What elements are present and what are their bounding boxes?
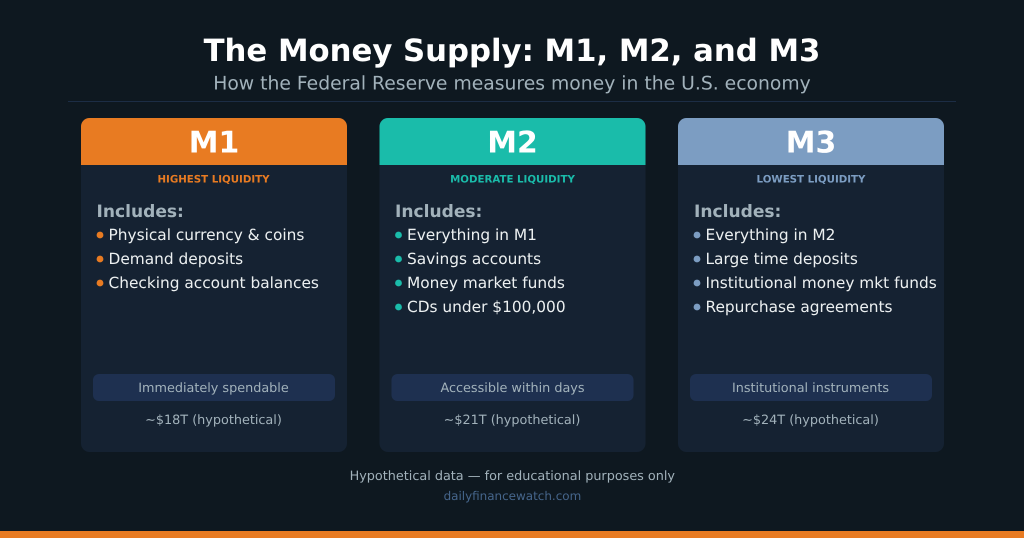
M2 badge [392,374,634,401]
M1 value: ~$18T (hypothetical) [145,413,282,428]
M1 list [97,226,319,292]
panel: M3 [678,118,944,452]
M1 list: Checking account balances [108,274,319,292]
M3 list: Large time deposits [706,250,858,268]
M3 list [694,226,937,316]
M3 value: ~$24T (hypothetical) [742,413,879,428]
footnote: Hypothetical data — for educational purposes only [350,469,675,484]
M2 badge: Accessible within days [440,381,585,396]
bottom accent bar [0,531,1024,538]
M1 includes heading: Includes: [96,202,184,222]
M2 includes heading: Includes: [395,202,482,222]
M3 list: Everything in M2 [706,226,835,244]
title: The Money Supply: M1, M2, and M3 [204,33,820,69]
M3 badge [690,374,932,401]
M2 value: ~$21T (hypothetical) [444,413,580,428]
M2 list: Money market funds [407,274,565,292]
M3 badge: Institutional instruments [732,381,889,396]
M2 header [380,118,646,165]
M3 includes heading: Includes: [694,202,781,222]
M1 badge: Immediately spendable [138,381,289,396]
panel: M2 [380,118,646,452]
M2 list: Everything in M1 [407,226,537,244]
M2 label: M2 [487,126,538,160]
M3 label: M3 [786,126,836,160]
M3 header [678,118,944,165]
M1 list: Physical currency & coins [108,226,304,244]
M2 liquidity: MODERATE LIQUIDITY [450,174,575,186]
panel: M1 [81,118,347,452]
M2 list: Savings accounts [407,250,541,268]
M3 list: Institutional money mkt funds [706,274,937,292]
M1 header [81,118,347,165]
M1 label: M1 [189,126,239,160]
M3 list: Repurchase agreements [706,298,893,316]
source: dailyfinancewatch.com [444,489,581,503]
M1 list: Demand deposits [108,250,243,268]
M3 liquidity: LOWEST LIQUIDITY [757,174,866,186]
subtitle: How the Federal Reserve measures money in the U.S. economy [213,74,811,94]
M2 list: CDs under $100,000 [407,298,566,316]
M1 badge [93,374,335,401]
M2 list [395,226,566,316]
M1 liquidity: HIGHEST LIQUIDITY [157,174,270,186]
